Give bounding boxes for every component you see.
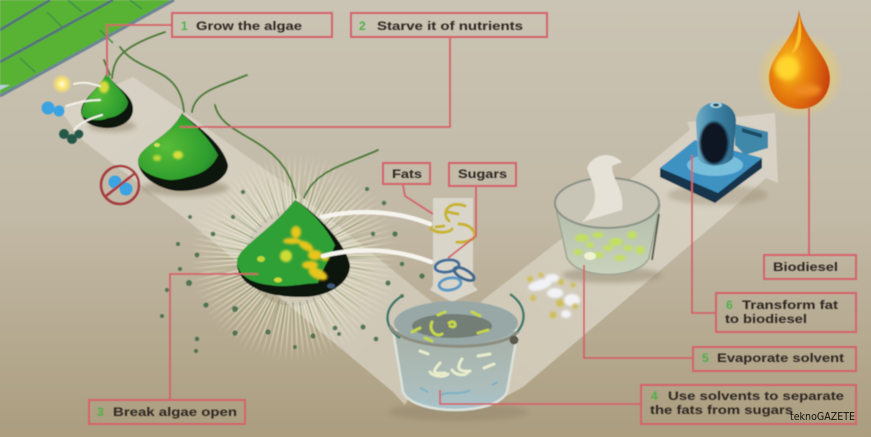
biodiesel processor machine xyxy=(660,102,768,205)
label 1: grow the algae: 1 xyxy=(181,19,188,33)
algae 1: growing xyxy=(81,72,136,132)
white feed arrows xyxy=(66,83,102,130)
label 6: transform fat to biodiesel xyxy=(692,155,856,332)
label 2: starve it of nutrients xyxy=(180,13,547,127)
label 3: break algae open xyxy=(89,274,258,424)
label 5: evaporate solvent: 5 xyxy=(702,351,709,365)
burst of hairs around algae xyxy=(217,182,369,334)
label 4: use solvents to separate the fats from sugars xyxy=(440,385,856,424)
icon: no nutrients symbol xyxy=(101,166,139,204)
algae 2: starved xyxy=(138,113,229,196)
label 1: grow the algae xyxy=(107,13,332,76)
label 6: transform fat to biodiesel: Transform fat xyxy=(742,298,838,312)
icon: sun xyxy=(52,74,72,94)
watermark: teknoGAZETE xyxy=(790,410,855,423)
label 5: evaporate solvent: Evaporate solvent xyxy=(717,351,844,365)
fats molecules xyxy=(431,204,475,242)
released particles xyxy=(160,187,425,353)
label 2: starve it of nutrients: 2 xyxy=(359,19,366,33)
label: biodiesel: Biodiesel xyxy=(773,260,838,274)
label: sugars xyxy=(448,163,516,258)
white arrows to fats and sugars xyxy=(322,212,431,262)
vapor molecules xyxy=(527,272,580,318)
label: fats: Fats xyxy=(392,167,422,181)
label 6: transform fat to biodiesel: to biodiesel xyxy=(725,312,807,326)
evaporating bowl xyxy=(555,155,662,283)
label 3: break algae open: Break algae open xyxy=(113,405,237,419)
solar panel field xyxy=(0,0,174,96)
solvent bowl xyxy=(388,294,528,421)
central down arrow xyxy=(430,198,478,302)
label 4: use solvents to separate the fats from sugars: 4 xyxy=(651,389,658,403)
label: biodiesel xyxy=(764,108,856,279)
label: fats xyxy=(383,163,433,214)
icon: nutrient molecules green xyxy=(59,129,84,144)
biodiesel drop xyxy=(756,10,844,119)
icon: nutrient molecules blue xyxy=(42,102,64,116)
label 6: transform fat to biodiesel: 6 xyxy=(726,298,733,312)
label 4: use solvents to separate the fats from sugars: the fats from sugars xyxy=(650,403,793,417)
label 3: break algae open: 3 xyxy=(97,405,104,419)
process path: right band with arrowhead xyxy=(440,113,778,405)
label: sugars: Sugars xyxy=(458,167,507,181)
label 5: evaporate solvent xyxy=(584,265,856,371)
process path: left band xyxy=(60,77,452,405)
label 1: grow the algae: Grow the algae xyxy=(196,19,302,33)
sugars rings xyxy=(434,258,476,292)
label 2: starve it of nutrients: Starve it of nutrients xyxy=(377,19,523,33)
algae 3: broken open with fats xyxy=(237,200,350,297)
label 4: use solvents to separate the fats from sugars: Use solvents to separate xyxy=(668,389,844,403)
flagella xyxy=(104,32,378,198)
